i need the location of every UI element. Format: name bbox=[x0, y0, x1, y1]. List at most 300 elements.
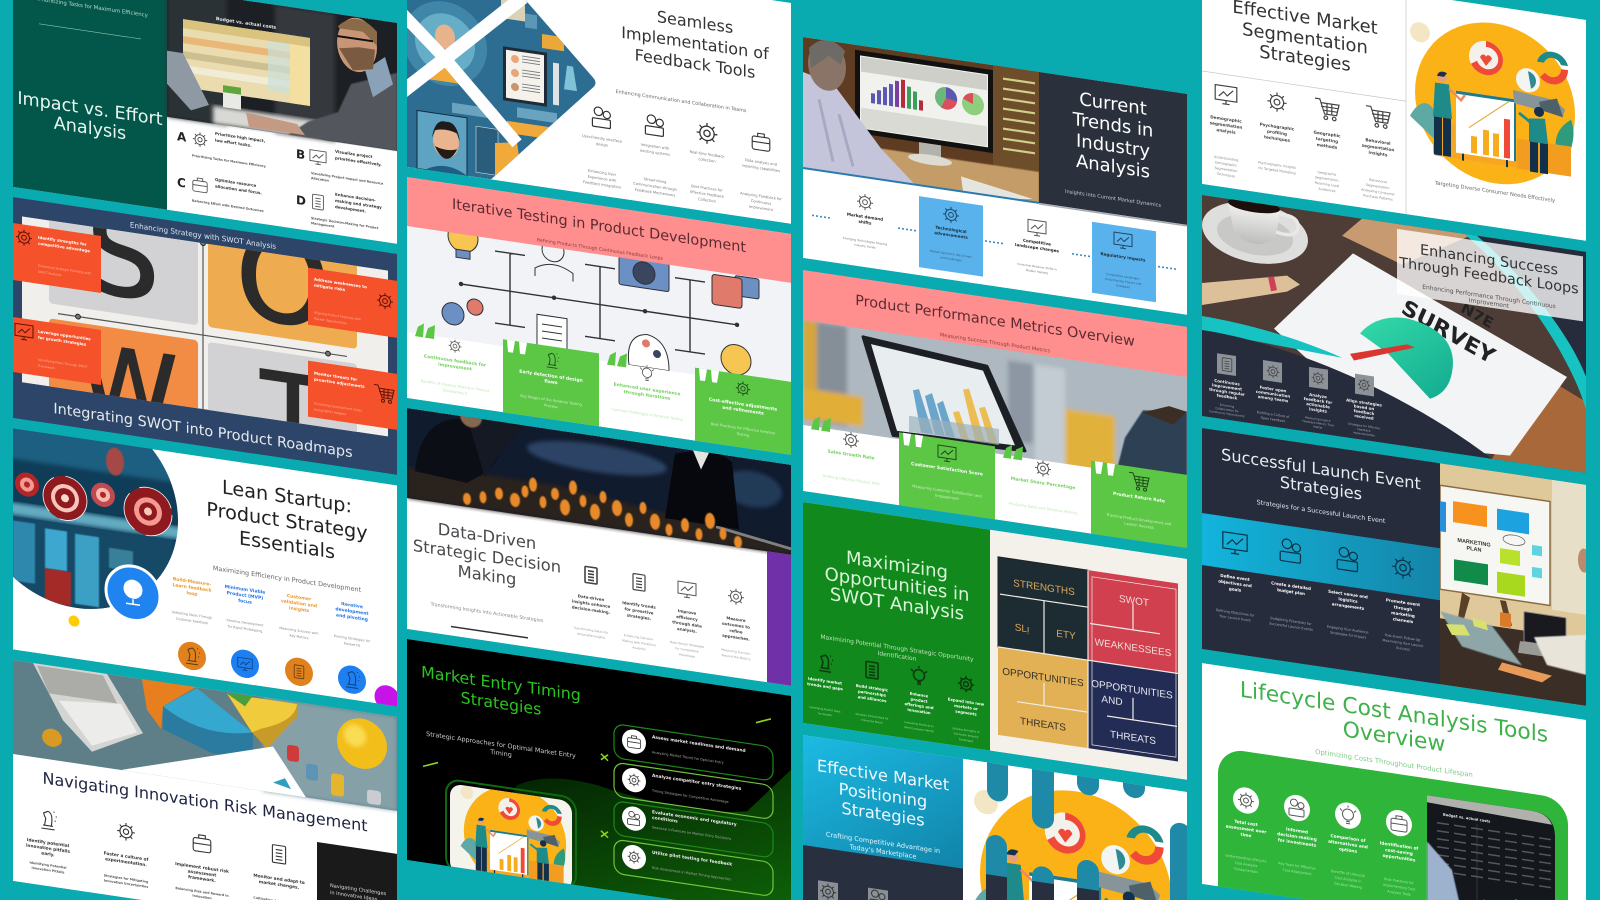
item A: A bbox=[177, 129, 187, 145]
column: define objectives: goals bbox=[1229, 586, 1242, 593]
item C bbox=[178, 178, 264, 212]
item B: B bbox=[296, 147, 305, 162]
column: foster communication: communication bbox=[1256, 389, 1290, 399]
title: Overview bbox=[1343, 717, 1445, 757]
column: psychographic: Psychographic Insights bbox=[1258, 160, 1296, 170]
item: technological bbox=[919, 196, 983, 277]
orange card: weaknesses bbox=[308, 268, 397, 338]
column: comparison: Decision Making bbox=[1334, 882, 1362, 890]
item: market demand: Emerging Technologies Shaping bbox=[843, 236, 887, 246]
column: enhance offerings: innovation bbox=[907, 707, 931, 715]
panel: Maximizing Opportunities in SWOT slide bbox=[803, 502, 1187, 780]
title: Impact vs. Effort bbox=[17, 89, 163, 130]
column: identify trends: strategies. bbox=[627, 613, 652, 621]
column: demographic: Segmentation bbox=[1214, 166, 1238, 173]
column: data-driven insights bbox=[572, 564, 611, 641]
panel: Successful Launch Event slide bbox=[1202, 428, 1590, 706]
item: technological: and Challenges bbox=[940, 255, 962, 263]
column: comparison: Benefits of Lifecycle bbox=[1331, 869, 1365, 878]
panel: Product Performance Metrics slide bbox=[803, 270, 1187, 548]
teal pill decorations bbox=[986, 762, 1187, 900]
column: informed decisions: Cost Assessment bbox=[1283, 868, 1312, 876]
column: demographic: Demographic bbox=[1215, 160, 1237, 168]
column: risk framework: Balancing Risk and Reward in bbox=[175, 886, 229, 898]
title: Feedback Tools bbox=[635, 45, 755, 82]
column: interface: design bbox=[596, 142, 608, 148]
column: improve efficiency: through data bbox=[672, 619, 702, 629]
column: risk framework bbox=[175, 831, 229, 900]
SWOT grid graphic: ETY bbox=[1056, 629, 1076, 642]
card: cost-effective: Best Practices for Effective Iterative bbox=[711, 422, 776, 436]
card: customer satisfaction: Measuring Customer Satisfaction and bbox=[912, 484, 982, 499]
whiteboard lettering: PLAN bbox=[1467, 546, 1481, 554]
column: iterative development: Market Fit bbox=[344, 641, 361, 648]
column: continuous improvement: feedback bbox=[1217, 393, 1238, 401]
column: interface: Enhancing User bbox=[588, 169, 617, 177]
column: improve efficiency: Improve bbox=[678, 608, 697, 616]
column: identify bbox=[26, 808, 70, 875]
photo: pie chart on desk bbox=[13, 655, 397, 811]
column: continuous improvement: improvement bbox=[1212, 382, 1242, 392]
card: customer satisfaction: Engagement bbox=[935, 494, 959, 501]
SWOT photo: T bbox=[260, 348, 326, 480]
purple side bar bbox=[767, 551, 791, 686]
panel: Data-Driven Strategic Decision Making slide bbox=[407, 396, 791, 686]
item: regulatory: Strategies bbox=[1116, 283, 1131, 289]
item: technological: advancements bbox=[934, 230, 968, 240]
column: informed decisions: Informed bbox=[1286, 826, 1308, 836]
column: foster communication bbox=[1256, 359, 1290, 424]
column: culture: Strategies for Mitigating bbox=[104, 873, 149, 884]
list item 3: Evaluate economic and regulatory bbox=[652, 809, 737, 828]
column: promote event: through bbox=[1394, 604, 1412, 612]
dark lower panel bbox=[1202, 330, 1492, 459]
column: integration: Integration with bbox=[641, 143, 669, 151]
item: regulatory: Analyzing Key Players and bbox=[1105, 277, 1142, 286]
column: culture: Foster a culture of bbox=[104, 850, 148, 863]
column: build partnerships: partnerships bbox=[858, 689, 887, 698]
column: continuous improvement bbox=[1209, 352, 1246, 418]
column: promote event: Success bbox=[1396, 646, 1410, 652]
item B: Visualize project bbox=[335, 149, 372, 159]
list item 2 bbox=[614, 762, 773, 820]
column: comparison bbox=[1328, 800, 1368, 891]
column: measure outcomes: refine bbox=[729, 628, 743, 635]
column: expand markets: Overcome Industry bbox=[954, 731, 979, 739]
column: demographic: Techniques bbox=[1216, 172, 1235, 178]
column: build partnerships: and alliances bbox=[858, 694, 887, 703]
item: regulatory: Competitive Landscape: bbox=[1106, 272, 1140, 281]
translucent title box bbox=[1397, 229, 1583, 321]
column: identify: innovation pitfalls bbox=[26, 843, 70, 855]
green title panel bbox=[803, 502, 990, 751]
item B bbox=[297, 149, 384, 185]
card: market share bbox=[995, 442, 1091, 534]
column: identify trends: Enhancing Decision- bbox=[624, 633, 654, 642]
panel: Enhancing Success Through Feedback Loops slide bbox=[1202, 192, 1586, 473]
subtitle: Enhancing Strategy with SWOT Analysis bbox=[130, 220, 276, 251]
column: build partnerships: Strategic Partnerships for bbox=[855, 712, 889, 721]
column: integration: Feedback Mechanisms bbox=[635, 188, 675, 198]
title: Analysis bbox=[54, 114, 126, 144]
decorative marks bbox=[423, 667, 771, 862]
column: measure outcomes: Measure bbox=[726, 615, 746, 623]
column: total cost: Total cost bbox=[1234, 819, 1258, 828]
panel: Navigating Innovation Risk Management slide bbox=[13, 655, 397, 900]
subtitle: Enhancing Communication and Collaboration in Teams bbox=[616, 89, 747, 114]
column: data analysis bbox=[740, 131, 782, 214]
column: analyze feedback: feedback for bbox=[1304, 396, 1332, 405]
column: geographic: Audiences bbox=[1319, 187, 1336, 193]
column: enhance offerings bbox=[904, 664, 934, 733]
title: SWOT Analysis bbox=[830, 584, 964, 625]
list item 1: Assess market readiness and demand bbox=[652, 734, 746, 754]
column: promote event: Maximizing Your Launch bbox=[1383, 638, 1423, 648]
column: comparison: options bbox=[1339, 846, 1357, 855]
column: behavioral: Purchase Patterns bbox=[1363, 193, 1393, 202]
column: venue logistics: Select venue and bbox=[1328, 589, 1368, 600]
item A: low effort tasks. bbox=[215, 138, 252, 148]
hexagon image of interface icons bbox=[393, 0, 607, 197]
subtitle: Strategies for a Successful Launch Event bbox=[1257, 499, 1386, 525]
column: demographic: analysis bbox=[1216, 127, 1236, 135]
item D: Strategic Decision-Making for Project bbox=[311, 216, 379, 230]
dark band behind lower pills bbox=[986, 874, 1099, 900]
panel: Impact vs. Effort Analysis slide bbox=[13, 0, 397, 244]
column: promote event bbox=[1383, 554, 1423, 654]
column: iterative development: and pivoting bbox=[336, 612, 368, 623]
column: build-measure-learn bbox=[172, 576, 213, 673]
item: competitive: Modern Markets bbox=[1026, 268, 1049, 275]
column: behavioral: Behavioral bbox=[1365, 137, 1391, 146]
column: expand markets bbox=[948, 673, 985, 745]
title: Strategies bbox=[841, 799, 925, 830]
card: product return: Tracking Product Development and bbox=[1106, 513, 1172, 527]
orange card: threats: Using SWOT Insights bbox=[314, 408, 346, 416]
column: analyze feedback: Matter bbox=[1313, 425, 1323, 430]
column: customer validation: insights bbox=[289, 605, 309, 614]
column: identify trends: Analytics bbox=[632, 645, 646, 651]
column: culture: Innovation Uncertainties bbox=[104, 878, 148, 889]
title: Effective Market bbox=[817, 756, 950, 795]
item: market demand: Market demand bbox=[847, 212, 883, 222]
title: Implementation of bbox=[621, 23, 769, 64]
column: data-driven insights: Transforming Data into bbox=[573, 626, 608, 635]
title: Integrating SWOT into Product Roadmaps bbox=[53, 401, 353, 461]
item: market demand bbox=[843, 191, 887, 251]
title: Successful Launch Event bbox=[1221, 445, 1421, 493]
column: expand markets: Utilizing Strengths to bbox=[952, 726, 980, 734]
column: data analysis: reporting capabilities bbox=[742, 164, 780, 173]
title: Trends in bbox=[1072, 109, 1153, 142]
column: customer validation bbox=[279, 592, 319, 689]
card: enhanced experience: Common Challenges in Iterative Testing bbox=[611, 407, 683, 422]
panel: Iterative Testing slide bbox=[407, 177, 791, 455]
orange card: opportunities: Leverage opportunities bbox=[38, 329, 91, 342]
subtitle: Optimizing Costs Throughout Product Lifespan bbox=[1315, 748, 1473, 779]
column: expand markets: markets or bbox=[954, 703, 978, 711]
item A: Prioritize high impact, bbox=[215, 131, 266, 143]
orange card: strengths bbox=[13, 223, 101, 293]
card: customer satisfaction: Customer Satisfaction Score bbox=[911, 461, 983, 478]
list item 2: Analyze competitor entry strategies bbox=[652, 773, 742, 792]
list item 3 bbox=[614, 801, 773, 858]
column: venue logistics: logistics bbox=[1338, 596, 1358, 604]
column: define objectives: Defining Objectives for bbox=[1216, 608, 1255, 618]
card: continuous feedback: Benefits of Iterative Testing in Product bbox=[421, 379, 490, 393]
column: build partnerships bbox=[855, 660, 889, 726]
column: MVP: Iterative Development bbox=[227, 618, 264, 628]
column: culture: experimentation. bbox=[105, 856, 147, 868]
column: budget plan: Budgeting Essentials for bbox=[1270, 616, 1312, 626]
column: improve efficiency: Advantage bbox=[679, 652, 695, 659]
column: continuous improvement: Continuous bbox=[1214, 378, 1240, 387]
title: Strategic Decision bbox=[413, 536, 561, 577]
column: behavioral bbox=[1361, 105, 1396, 202]
title: Iterative Testing in Product Development bbox=[452, 197, 746, 256]
column: foster communication: Open Feedback bbox=[1261, 416, 1285, 423]
column: align strategies: received bbox=[1354, 413, 1374, 421]
column: risk framework: Implement robust risk bbox=[175, 861, 229, 875]
subtitle: Refining Products Through Continuous Feedback Loops bbox=[537, 237, 664, 262]
column: real-time feedback: Collection bbox=[698, 197, 716, 204]
SWOT photo: W bbox=[79, 322, 177, 453]
item A: Prioritizing Tasks for Maximum Efficiency bbox=[192, 154, 267, 169]
column: align strategies: feedback bbox=[1354, 408, 1375, 416]
column: iterative development bbox=[334, 600, 371, 696]
column: expand markets: Expand into new bbox=[948, 696, 985, 707]
title: Product Performance Metrics Overview bbox=[855, 293, 1135, 350]
green title panel bbox=[13, 0, 167, 210]
list item 1: Analyzing Market Trends for Optimal Entry bbox=[652, 750, 724, 765]
list item 1 bbox=[614, 724, 773, 781]
column: iterative development: Iterative bbox=[341, 601, 363, 610]
title: Essentials bbox=[239, 526, 335, 564]
subtitle: Crafting Competitive Advantage in bbox=[826, 830, 940, 855]
panel: Market Entry Timing slide bbox=[407, 639, 791, 900]
right dark corner bbox=[1477, 236, 1586, 377]
card: cost-effective: Testing bbox=[736, 432, 749, 438]
item: competitive bbox=[1015, 217, 1059, 277]
card: continuous feedback: improvement bbox=[438, 362, 473, 373]
SWOT grid graphic: SWOT bbox=[1119, 594, 1149, 609]
orange card: opportunities: for growth strategies bbox=[38, 335, 87, 347]
column: promote event: Promote event bbox=[1386, 597, 1420, 607]
decorative yellow dot bbox=[68, 615, 80, 627]
SWOT grid graphic: WEAKNESSEES bbox=[1095, 637, 1172, 660]
list item 3: conditions bbox=[652, 815, 678, 825]
column: budget plan: budget plan bbox=[1277, 587, 1305, 596]
subtitle: Maximizing Potential Through Strategic Opportunity bbox=[820, 634, 974, 663]
column: data-driven insights: Actionable Insights bbox=[577, 632, 606, 640]
column: demographic: segmentation bbox=[1210, 120, 1242, 130]
card: cost-effective: Cost-effective adjustments bbox=[709, 397, 777, 413]
survey lettering top: N7E bbox=[1458, 299, 1496, 332]
title: Lifecycle Cost Analysis Tools bbox=[1240, 678, 1548, 748]
subtitle: Targeting Diverse Consumer Needs Effectively bbox=[1434, 180, 1555, 204]
column: psychographic: for Targeted Marketing bbox=[1258, 166, 1296, 175]
column: data analysis: Analyzing Feedback for bbox=[740, 191, 782, 202]
column: customer validation: Customer bbox=[287, 593, 312, 603]
item D: Enhance decision- bbox=[335, 192, 376, 203]
orange card: strengths: competitive advantage bbox=[38, 241, 90, 253]
column: interface: User-friendly interface bbox=[582, 134, 623, 144]
column: improve efficiency: efficiency bbox=[676, 614, 698, 622]
column: MVP: for Rapid Prototyping bbox=[228, 624, 262, 633]
column: identify market: Identifying Market Gaps bbox=[810, 705, 841, 714]
title: Strategies bbox=[1280, 473, 1362, 504]
column: define objectives: Define event bbox=[1220, 573, 1250, 582]
photo: marketing plan whiteboard bbox=[1440, 463, 1590, 706]
white paper shape bbox=[121, 746, 306, 798]
column: psychographic: techniques bbox=[1264, 134, 1291, 143]
orange card: weaknesses: mitigate risks bbox=[314, 283, 346, 292]
column: build partnerships: Build strategic bbox=[856, 683, 889, 693]
column: risk framework: assessment bbox=[188, 868, 216, 879]
column: risk framework: framework. bbox=[188, 874, 216, 884]
column: define objectives: objectives and bbox=[1218, 578, 1252, 588]
item: technological: Technological bbox=[935, 225, 967, 234]
SWOT grid graphic: THREATS bbox=[1110, 729, 1156, 747]
card: sales growth: Sales Growth Rate bbox=[828, 449, 874, 462]
card: early detection: Process bbox=[544, 403, 558, 409]
whiteboard lettering: MARKETING bbox=[1457, 538, 1491, 549]
column: data-driven insights: decision-making. bbox=[572, 604, 611, 615]
SWOT grid graphic bbox=[998, 557, 1178, 762]
column: total cost: Understanding Lifecycle bbox=[1226, 854, 1266, 864]
column: identification: Best Practices for bbox=[1384, 877, 1414, 885]
column: identification: Identification of bbox=[1380, 840, 1418, 852]
small triangle accent bbox=[273, 776, 291, 789]
panel: Effective Market Segmentation slide bbox=[1202, 0, 1586, 241]
title: Current bbox=[1079, 89, 1147, 120]
column: align strategies: Implementation bbox=[1353, 430, 1375, 438]
orange card: weaknesses: Market Opportunities bbox=[314, 317, 347, 325]
item: competitive: Consumer Behavior Shifts in bbox=[1017, 262, 1057, 272]
SWOT grid graphic: AND bbox=[1101, 694, 1123, 708]
subtitle: Identification bbox=[878, 650, 917, 663]
column: MVP: Product (MVP) bbox=[227, 590, 263, 602]
circular target photo bbox=[13, 428, 178, 609]
column: geographic: Geographic bbox=[1314, 130, 1341, 139]
column: comparison: Comparison of bbox=[1331, 833, 1366, 844]
item: technological: Market Dynamics: Key Drivers bbox=[930, 249, 972, 259]
photo: tablet with charts bbox=[803, 320, 1187, 548]
column: identify: Innovation Pitfalls bbox=[32, 866, 65, 875]
column: foster communication: Building a Culture of bbox=[1257, 410, 1290, 419]
column: geographic: methods bbox=[1317, 142, 1338, 150]
column: geographic: Segmentation: bbox=[1315, 175, 1339, 183]
column: psychographic: Psychographic bbox=[1260, 122, 1295, 132]
column: foster communication: Foster open bbox=[1260, 385, 1287, 394]
column: enhance offerings: offerings and bbox=[904, 701, 934, 710]
column: align strategies: Feedback bbox=[1357, 427, 1371, 433]
column: interface: Experience with bbox=[588, 175, 616, 183]
green glow shape bbox=[467, 722, 791, 900]
column: total cost: assessment over bbox=[1226, 824, 1267, 836]
column: identification: cost-saving bbox=[1385, 847, 1413, 857]
panel: Current Trends in Industry Analysis slide bbox=[803, 36, 1187, 315]
dark lower panel bbox=[803, 845, 963, 900]
column: demographic: Demographic bbox=[1210, 114, 1242, 124]
column: identification: Implementing Cost bbox=[1383, 883, 1416, 892]
column: venue logistics: arrangements bbox=[1332, 601, 1365, 611]
column: expand markets: Challenges bbox=[959, 737, 974, 743]
column: demographic: Understanding bbox=[1214, 155, 1238, 162]
column: build-measure-learn: loop bbox=[187, 590, 198, 598]
orange card: opportunities: Framework bbox=[38, 364, 55, 370]
column: real-time feedback: Effective Feedback bbox=[690, 190, 725, 199]
column: build-measure-learn: Build-Measure- bbox=[173, 576, 211, 588]
column: align strategies: Align strategies bbox=[1346, 397, 1383, 408]
column: budget plan: Successful Launch Events bbox=[1269, 621, 1313, 632]
panel: Effective Market Positioning slide bbox=[803, 735, 1187, 900]
column: measure outcomes: outcomes to bbox=[722, 621, 750, 630]
subtitle: Measuring Success Through Product Metrics bbox=[940, 332, 1050, 355]
teal curved band bbox=[1464, 234, 1586, 410]
dark left panel bbox=[1202, 428, 1440, 684]
card: early detection: Early detection of design bbox=[519, 369, 583, 384]
title: Positioning bbox=[839, 779, 927, 811]
column: total cost bbox=[1226, 784, 1267, 876]
column: informed decisions: for investments bbox=[1278, 837, 1317, 849]
item: regulatory: Regulatory impacts bbox=[1101, 251, 1146, 263]
title: Making bbox=[458, 562, 516, 589]
column: identify trends: Making with Predictive bbox=[622, 638, 656, 647]
column: continuous improvement: Collaboration for bbox=[1215, 406, 1239, 414]
title: Seamless bbox=[657, 7, 733, 37]
column: data-driven insights: insights enhance bbox=[572, 598, 610, 609]
title: Strategies bbox=[461, 688, 541, 719]
orange card: threats: proactive adjustments bbox=[314, 377, 365, 389]
column: improve efficiency: Data-Driven Strategies bbox=[670, 640, 705, 649]
column: measure outcomes bbox=[721, 587, 751, 661]
dashboard heading: Budget vs. actual costs bbox=[1443, 813, 1490, 824]
title: Navigating Innovation Risk Management bbox=[42, 768, 368, 835]
photo: survey on desk bbox=[1202, 192, 1586, 473]
blue title panel bbox=[803, 735, 963, 870]
black callout: Navigating Challenges bbox=[330, 883, 387, 897]
column: enhance offerings: product bbox=[910, 696, 928, 704]
column: psychographic: profiling bbox=[1267, 129, 1287, 137]
column: behavioral: Behavioral bbox=[1369, 178, 1387, 184]
survey lettering: SURVEY bbox=[1398, 295, 1499, 370]
card: sales growth bbox=[803, 414, 899, 505]
column: geographic: targeting bbox=[1316, 136, 1338, 144]
orange card: opportunities: Identifying Risks Through SWOT bbox=[38, 358, 88, 369]
column: informed decisions: Key Tools for Effective bbox=[1278, 861, 1316, 871]
card: cost-effective bbox=[695, 368, 791, 455]
column: data analysis: Continuous bbox=[751, 199, 771, 206]
list item 4: Utilize pilot testing for feedback bbox=[652, 850, 733, 868]
column: MVP bbox=[225, 584, 265, 681]
column: informed decisions bbox=[1277, 792, 1317, 877]
column: identification: Analysis Tools bbox=[1387, 889, 1411, 897]
subtitle: Timing bbox=[489, 748, 512, 759]
column: customer validation: Measuring Success with bbox=[279, 626, 319, 636]
card: enhanced experience bbox=[599, 349, 695, 441]
orange card: strengths: SWOT Analysis bbox=[38, 270, 61, 277]
process diagram with icons bbox=[442, 219, 759, 387]
item B: priorities effectively. bbox=[335, 155, 382, 167]
column: identify: Identifying Potential bbox=[29, 860, 67, 870]
column: monitor: market changes. bbox=[259, 879, 300, 891]
column: identify trends bbox=[622, 572, 656, 653]
column: define objectives: Your Launch Event bbox=[1219, 614, 1251, 623]
column: promote event: channels bbox=[1393, 616, 1414, 624]
column: identify market: for Growth bbox=[818, 711, 832, 717]
column: measure outcomes: Beyond the Metrics bbox=[722, 653, 751, 661]
